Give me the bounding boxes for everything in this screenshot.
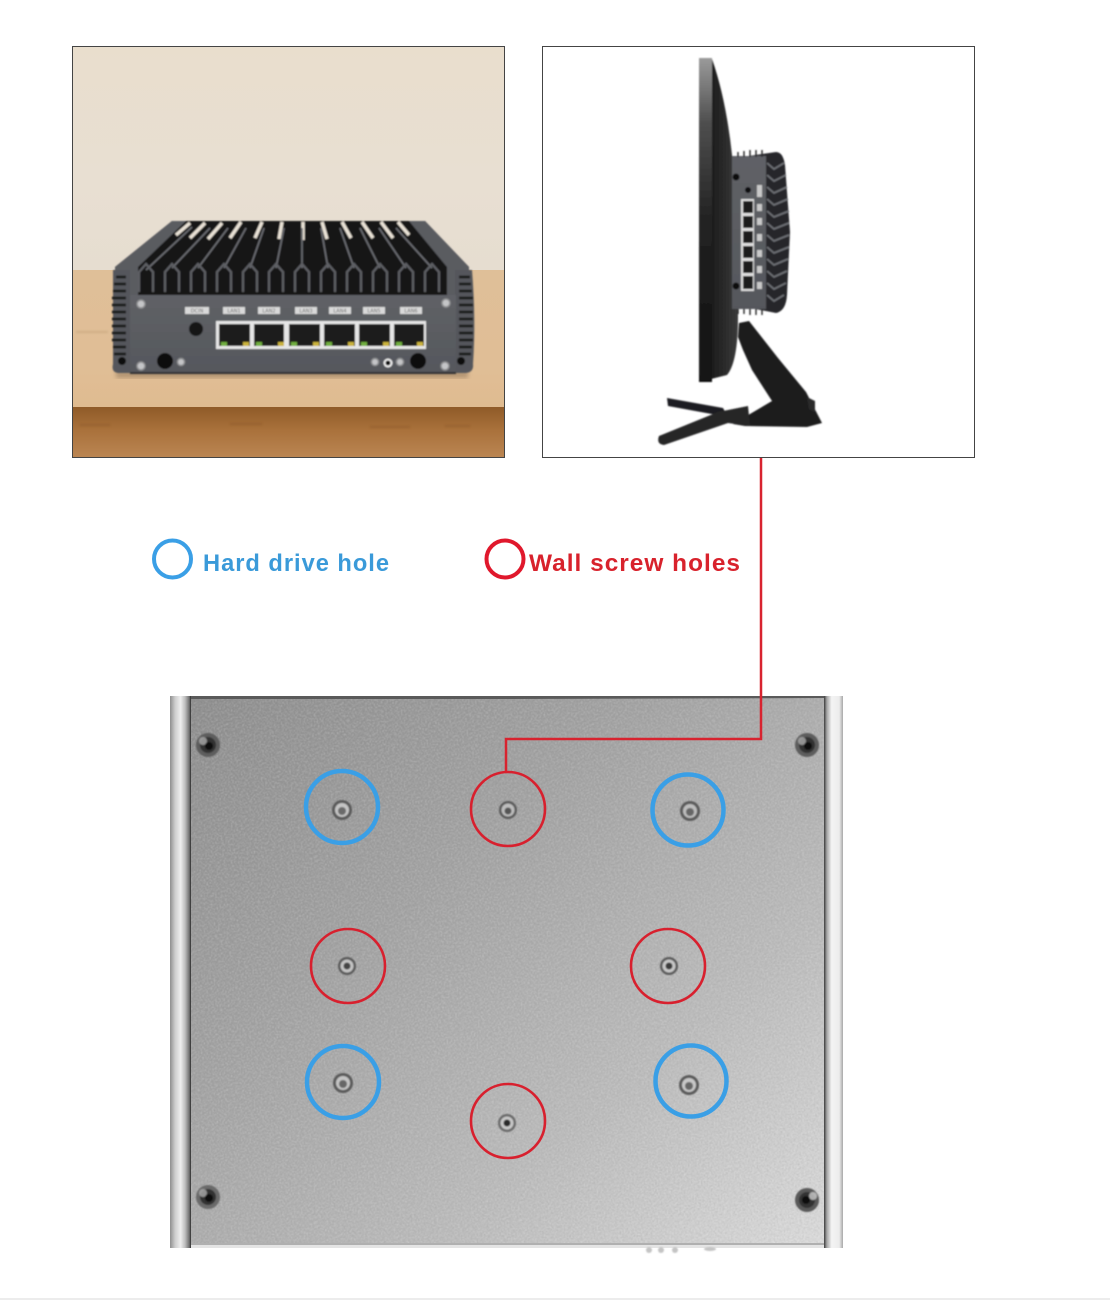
port labels: LAN5 <box>367 308 381 314</box>
table top <box>72 270 505 407</box>
front panel <box>130 295 456 374</box>
frame <box>542 46 974 458</box>
LAN ports on PC <box>741 199 754 291</box>
blue hard drive hole markers <box>306 771 726 1118</box>
port labels: LAN6 <box>404 308 418 314</box>
mounted PC <box>735 152 790 313</box>
legend icon: red circle <box>486 540 524 578</box>
right rail <box>824 696 843 1248</box>
port labels: DCIN <box>191 308 204 314</box>
heat-sink fins <box>767 163 789 301</box>
plate surface <box>190 697 825 1247</box>
fin highlights <box>146 227 432 270</box>
LAN port block <box>216 321 426 349</box>
mounting hole standoffs <box>332 800 700 1132</box>
panel: mini PC on table photo <box>72 46 505 458</box>
top and bottom fins <box>738 150 762 315</box>
table front edge <box>72 407 505 458</box>
wall background <box>72 46 505 271</box>
light gaps between fins <box>176 222 409 240</box>
legend text: Wall screw holes <box>529 550 741 577</box>
monitor stand <box>733 321 822 427</box>
red wall screw hole markers <box>311 772 705 1158</box>
monitor body <box>699 58 738 382</box>
power jack <box>189 322 203 336</box>
corner screws <box>196 733 819 1212</box>
mini PC front view <box>112 221 474 374</box>
device shadow <box>116 371 468 378</box>
legend icon: blue circle <box>154 540 191 578</box>
wood streaks <box>76 332 470 427</box>
port labels: LAN4 <box>333 308 347 314</box>
left rail <box>170 696 191 1248</box>
antenna holes and screws <box>157 353 173 369</box>
port labels: LAN3 <box>299 308 313 314</box>
tabs under plate <box>646 1247 716 1253</box>
top heat-sink <box>115 221 469 296</box>
legend: hard drive hole <box>154 540 390 578</box>
left side fins <box>113 270 130 373</box>
legend: wall screw holes <box>486 540 741 578</box>
panel: metal bottom plate of the PC <box>170 696 843 1253</box>
right side fins <box>455 270 474 373</box>
connector line: red line from monitor panel to wall screw hole <box>506 458 761 772</box>
port labels <box>185 307 422 314</box>
port labels: LAN2 <box>262 308 276 314</box>
panel: monitor side view with mounted PC <box>542 46 974 458</box>
port labels: LAN1 <box>227 308 241 314</box>
legend text: Hard drive hole <box>203 550 390 577</box>
Y shaped fin roots <box>139 264 439 292</box>
photo frame <box>72 46 504 458</box>
